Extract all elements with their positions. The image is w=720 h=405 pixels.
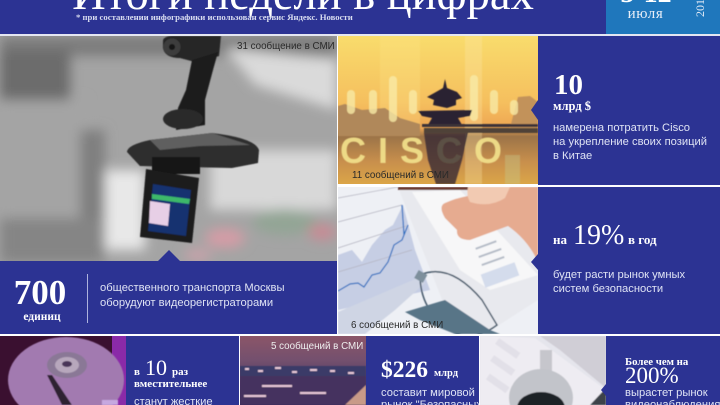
panel: 700 units: единиц bbox=[23, 311, 61, 323]
panel: 200 percent: Более чем на bbox=[625, 356, 689, 368]
caption: dashcam messages: 31 сообщение в СМИ bbox=[237, 41, 335, 52]
icon: glasses bbox=[420, 272, 497, 336]
panel: 10 times bbox=[126, 336, 239, 405]
panel: 10 times: в bbox=[134, 366, 140, 378]
panel: 700 units: 700 bbox=[14, 273, 66, 312]
panel: 10 billion bbox=[531, 36, 720, 185]
panel: 10 billion: млрд $ bbox=[553, 99, 591, 113]
panel: 10 times: раз bbox=[172, 366, 189, 378]
panel: 200 percent: вырастет рынок bbox=[625, 387, 708, 399]
icon: camera screen bbox=[148, 184, 191, 236]
panel: 200 percent bbox=[601, 336, 720, 405]
panel: 19 percent: 19% bbox=[573, 220, 624, 251]
header band bbox=[0, 0, 720, 36]
icon: hand bbox=[442, 187, 538, 262]
icon: camera mount bbox=[163, 36, 221, 62]
panel: security camera photo bbox=[480, 336, 606, 405]
panel: 10 billion: в Китае bbox=[553, 150, 592, 162]
panel: 10 billion: на укрепление своих позиций bbox=[553, 136, 707, 148]
icon: dome camera bbox=[509, 369, 573, 405]
panel: 10 billion: намерена потратить Cisco bbox=[553, 122, 690, 134]
panel: 200 percent: 200% bbox=[625, 363, 679, 388]
panel: 19 percent: будет расти рынок умных bbox=[553, 269, 686, 281]
date block bbox=[606, 0, 720, 34]
panel: 10 times: 10 bbox=[145, 355, 167, 380]
icon: pagoda bbox=[418, 79, 538, 184]
panel: hard drive photo bbox=[0, 336, 126, 405]
panel: 10 times: вместительнее bbox=[134, 378, 207, 390]
panel: 19 percent: систем безопасности bbox=[553, 283, 663, 295]
icon: line chart bbox=[338, 205, 408, 291]
panel: 700 units: общественного транспорта Москвы bbox=[100, 282, 284, 294]
caption: Cisco messages: 11 сообщений в СМИ bbox=[352, 170, 449, 181]
panel: 226 billion: составит мировой bbox=[381, 387, 475, 399]
panel: 226 billion: млрд bbox=[434, 368, 459, 379]
panel: 226 billion: $226 bbox=[381, 357, 428, 383]
icon: hard disk bbox=[8, 337, 124, 405]
panel: 700 units: оборудуют видеорегистраторами bbox=[100, 297, 273, 309]
panel: chart photo bbox=[338, 187, 538, 336]
date block: июля bbox=[628, 6, 663, 22]
panel: 19 percent: на bbox=[553, 232, 567, 247]
footnote: * при составлении инфографики использован сервис Яндекс. Новости bbox=[76, 12, 353, 22]
panel: Cisco photo: CISCO bbox=[340, 130, 514, 171]
panel: city photo bbox=[240, 336, 366, 405]
caption: chart messages: 6 сообщений в СМИ bbox=[351, 320, 443, 331]
panel: 10 billion: 10 bbox=[554, 69, 583, 101]
panel: 226 billion bbox=[366, 336, 482, 405]
panel: 19 percent: в год bbox=[628, 232, 657, 247]
panel: 19 percent bbox=[531, 187, 720, 334]
caption: city messages: 5 сообщений в СМИ bbox=[271, 341, 363, 352]
panel: Cisco photo bbox=[338, 36, 538, 184]
panel: 700 units bbox=[0, 250, 337, 334]
panel: dashcam photo bbox=[0, 36, 337, 263]
